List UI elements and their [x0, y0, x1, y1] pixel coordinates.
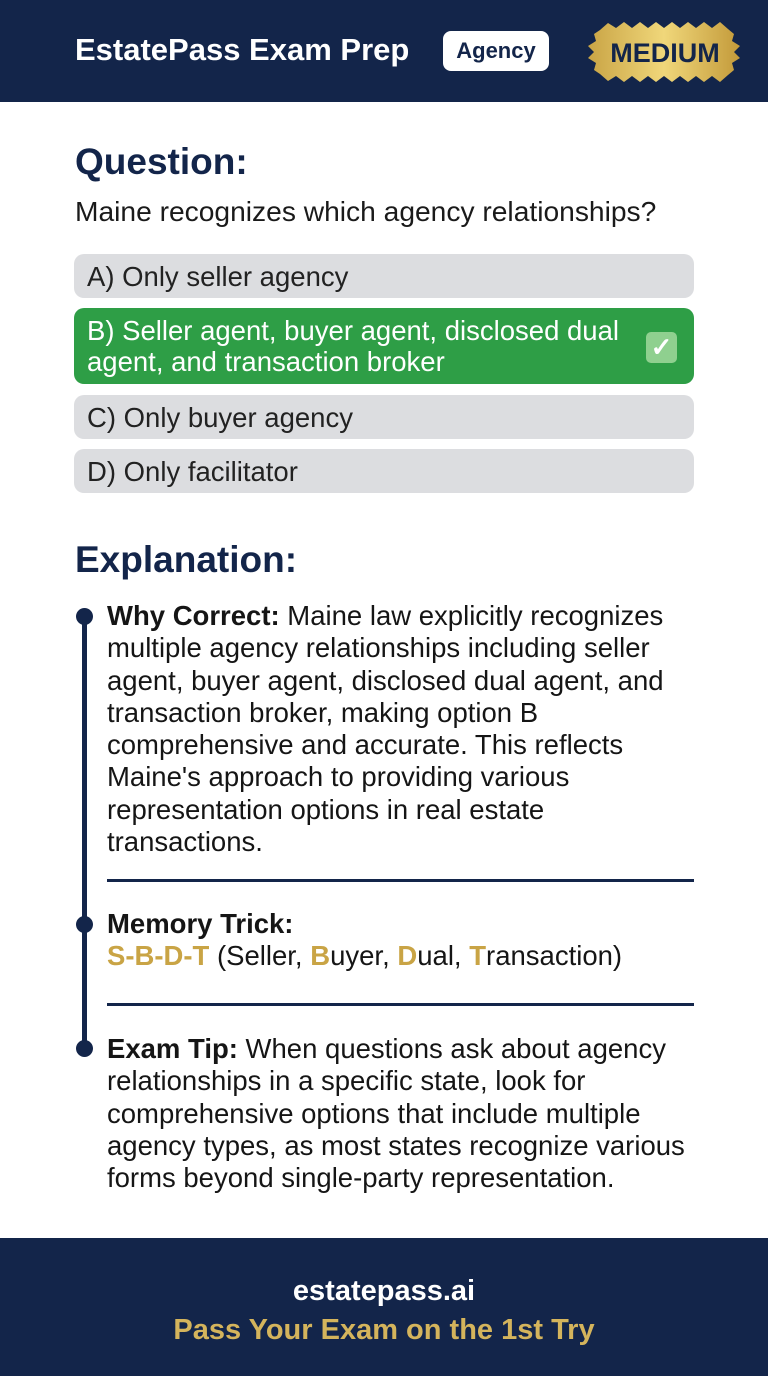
footer site: estatepass.ai	[293, 1275, 475, 1307]
option A: A) Only seller agency	[87, 260, 348, 292]
header title: EstatePass Exam Prep	[75, 32, 409, 67]
memory trick: S-B-D-T (Seller, Buyer, Dual, Transaction)	[107, 940, 622, 971]
memory trick: Memory Trick:	[107, 908, 293, 939]
tag: Agency: Agency	[456, 38, 536, 63]
option C	[74, 395, 694, 439]
footer	[0, 1238, 768, 1376]
timeline	[82, 612, 87, 1050]
exam tip: Exam Tip: When questions ask about agency relationships in a specific state, look for comprehensive options that include multiple agency types, as most states recognize various forms beyond single-party representation.	[107, 1033, 685, 1193]
icon: check: ✓	[651, 332, 672, 362]
option A	[74, 254, 694, 298]
badge: MEDIUM: MEDIUM	[610, 38, 720, 68]
header bar	[0, 0, 768, 102]
icon: check	[646, 332, 677, 363]
option C: C) Only buyer agency	[87, 402, 353, 432]
option D	[74, 449, 694, 493]
option B correct: agent, and transaction broker	[87, 346, 445, 377]
badge: MEDIUM	[588, 22, 740, 82]
question text: Maine recognizes which agency relationships?	[75, 195, 656, 227]
memory trick	[107, 908, 622, 971]
heading: Question: Question:	[75, 141, 248, 182]
option D: D) Only facilitator	[87, 456, 298, 486]
option B correct: B) Seller agent, buyer agent, disclosed dual	[87, 315, 619, 346]
heading: Explanation: Explanation:	[75, 539, 297, 580]
footer tagline: Pass Your Exam on the 1st Try	[173, 1314, 595, 1346]
tag: Agency	[443, 31, 549, 71]
why correct text: Why Correct: Maine law explicitly recognizes multiple agency relationships including seller agent, buyer agent, disclosed dual agent, and transaction broker, making option B comprehensive and accurate. This reflects Maine's approach to providing various representation options in real estate transactions.	[107, 600, 664, 857]
option B correct	[74, 308, 694, 384]
